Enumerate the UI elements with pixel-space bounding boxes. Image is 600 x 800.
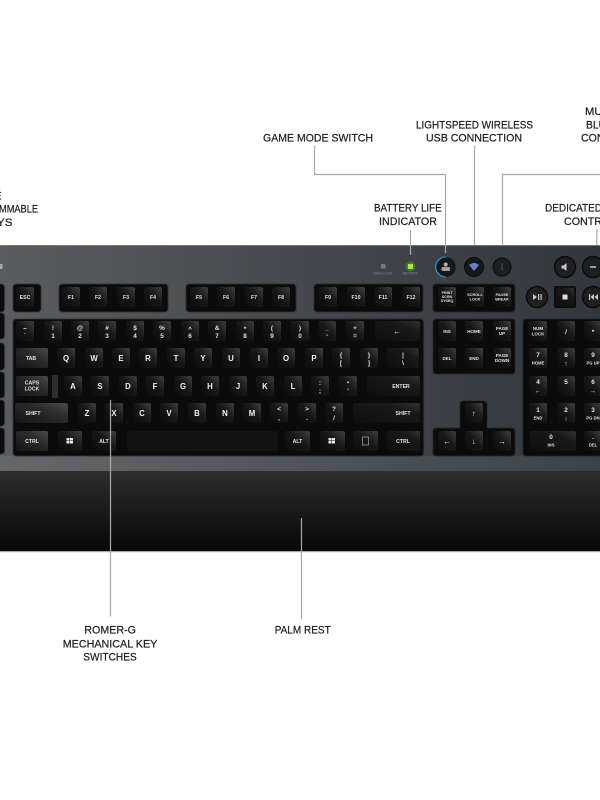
home key row: G — [180, 382, 186, 391]
number key row: = — [353, 333, 357, 340]
leader line: battery indicator — [410, 230, 412, 255]
label: lightspeed wireless — [416, 119, 533, 144]
home key row — [16, 375, 420, 398]
QWERTY key row: W — [90, 354, 98, 363]
function key row: F9 — [325, 295, 331, 301]
numeric keypad: ← — [535, 388, 541, 395]
shift key row: C — [139, 409, 145, 418]
function key row: F8 — [278, 295, 284, 301]
leader line: media controls — [596, 229, 598, 245]
shift key row: SHIFT — [26, 411, 41, 417]
navigation cluster: INS — [443, 329, 451, 334]
number key row: 9 — [270, 333, 274, 340]
numeric keypad: → — [590, 388, 596, 395]
numeric keypad: ↑ — [564, 360, 568, 368]
number key row: + — [353, 325, 357, 332]
label: palm rest: PALM REST — [275, 624, 331, 636]
number key row: 6 — [188, 333, 192, 340]
shift key row: M — [249, 409, 255, 418]
number key row: 5 — [160, 333, 164, 340]
number key row: ^ — [188, 325, 192, 333]
number key row: ( — [271, 325, 274, 332]
number key row: _ — [324, 325, 329, 332]
number key row: % — [159, 325, 165, 332]
arrow keys: ↑ — [472, 409, 476, 418]
number key row: $ — [133, 325, 137, 332]
arrow keys — [438, 403, 511, 451]
navigation cluster: DEL — [442, 356, 452, 361]
number key row: 3 — [105, 333, 109, 340]
number key row: ) — [299, 325, 301, 332]
navigation cluster: PAGE — [496, 326, 508, 331]
QWERTY key row: U — [228, 354, 234, 363]
home key row: LOCK — [25, 386, 40, 392]
numeric keypad: 1 — [536, 407, 540, 414]
shift key row: SHIFT — [396, 411, 411, 417]
number key row: 0 — [298, 333, 302, 340]
home key row: F — [153, 382, 158, 391]
shift key row: > — [305, 406, 309, 413]
shift key row: N — [222, 409, 228, 418]
home key row: K — [262, 382, 268, 391]
leader line: key switches — [110, 400, 112, 616]
bottom key row: ALT — [99, 439, 110, 445]
function key row: F10 — [352, 295, 361, 301]
navigation cluster: UP — [499, 331, 505, 336]
QWERTY key row: } — [368, 352, 371, 359]
number key row: # — [105, 325, 109, 332]
QWERTY key row: Q — [63, 354, 69, 363]
function key row: BREAK — [495, 298, 509, 302]
numeric keypad: 0 — [549, 434, 553, 441]
function key row: F6 — [223, 295, 229, 301]
home key row: : — [319, 380, 321, 387]
number key row: 4 — [133, 333, 137, 340]
number key row: - — [326, 332, 328, 339]
numeric keypad: END — [534, 416, 542, 420]
function key row — [16, 287, 511, 307]
label: programmable keys — [0, 190, 38, 229]
label: romer-g switches: ROMER-G — [84, 624, 136, 636]
QWERTY key row: O — [283, 354, 289, 363]
numeric keypad: 4 — [536, 379, 540, 386]
home key row: ENTER — [392, 384, 410, 390]
shift key row: , — [278, 415, 280, 422]
number key row — [16, 321, 420, 341]
numeric keypad: PG UP — [586, 360, 600, 366]
arrow keys: ← — [443, 437, 451, 446]
function key row: F2 — [95, 295, 101, 301]
numeric keypad: ↓ — [564, 416, 568, 422]
function key row: ESC — [20, 295, 31, 301]
home key row: " — [346, 381, 350, 388]
navigation cluster: PAGE — [496, 353, 508, 358]
home key row: L — [291, 382, 296, 391]
status indicators — [374, 262, 419, 276]
numeric keypad: 2 — [564, 407, 568, 414]
navigation cluster: DOWN — [495, 358, 509, 363]
palm rest — [0, 471, 600, 552]
shift key row: / — [333, 415, 335, 422]
keyboard body — [0, 245, 600, 471]
label: battery life indicator: INDICATOR — [379, 216, 437, 228]
label: battery life indicator: BATTERY LIFE — [374, 203, 442, 215]
numeric keypad: * — [592, 329, 595, 336]
icon: game mode button — [436, 257, 456, 277]
numeric keypad: 9 — [591, 352, 595, 359]
function key row: F5 — [196, 295, 202, 301]
numeric keypad: / — [565, 329, 567, 336]
number key row: 1 — [51, 333, 55, 340]
QWERTY key row: { — [340, 352, 343, 359]
leader line: game mode switch — [314, 146, 446, 253]
number key row: ! — [52, 325, 54, 332]
QWERTY key row: \ — [402, 360, 404, 367]
shift key row: < — [277, 406, 281, 413]
QWERTY key row: E — [118, 354, 124, 363]
home key row: ; — [319, 388, 321, 395]
arrow keys: → — [498, 437, 506, 446]
home key row: S — [97, 382, 103, 391]
navigation cluster — [438, 321, 511, 368]
label: romer-g switches — [63, 624, 158, 664]
QWERTY key row: ] — [368, 360, 370, 367]
numeric keypad: HOME — [532, 360, 544, 366]
leader line: palm rest — [300, 518, 302, 619]
QWERTY key row: | — [402, 352, 404, 359]
function key row: PAUSE — [496, 293, 509, 297]
numeric keypad: PG DN — [586, 416, 600, 420]
label: programmable keys: MMABLE — [0, 204, 38, 216]
QWERTY key row: P — [311, 354, 317, 363]
home key row: A — [70, 382, 76, 391]
label: bluetooth connection — [581, 106, 600, 144]
bottom key row — [16, 431, 420, 451]
number key row: * — [244, 326, 247, 333]
number key row: ` — [24, 333, 26, 340]
numeric keypad: LOCK — [532, 332, 545, 336]
function key row: LOCK — [470, 298, 481, 302]
label: lightspeed wireless: USB CONNECTION — [426, 132, 522, 144]
numeric keypad: 3 — [591, 407, 595, 414]
navigation cluster: END — [469, 356, 479, 361]
status indicators: CAPS LOCK — [374, 272, 393, 276]
function key row: F12 — [407, 295, 416, 301]
shift key row: ? — [332, 406, 336, 413]
leader line: bluetooth — [502, 174, 600, 245]
function key row: SCROLL — [467, 293, 483, 297]
numeric keypad: DEL — [589, 442, 598, 448]
function key row: SYSRQ — [441, 299, 453, 303]
numeric keypad: 8 — [564, 352, 568, 359]
shift key row: Z — [85, 409, 90, 418]
navigation cluster: HOME — [467, 329, 481, 334]
home key row: H — [207, 382, 213, 391]
numeric keypad — [529, 321, 600, 451]
number key row: @ — [77, 325, 83, 332]
bottom key row: CTRL — [396, 439, 411, 445]
QWERTY key row: TAB — [26, 356, 36, 362]
label: dedicated controls — [545, 203, 600, 228]
QWERTY key row: [ — [340, 360, 343, 367]
shift key row — [15, 403, 420, 423]
icon: bluetooth button — [493, 258, 511, 276]
numeric keypad: INS — [548, 442, 555, 448]
bottom key row: CTRL — [25, 439, 40, 445]
function key row: F7 — [251, 295, 257, 301]
function key row: PRINT — [442, 291, 453, 295]
home key row: D — [125, 382, 131, 391]
number key row: 2 — [78, 333, 82, 340]
number key row: 8 — [243, 333, 247, 340]
label: game mode switch: GAME MODE SWITCH — [263, 132, 373, 144]
QWERTY key row — [16, 348, 419, 368]
QWERTY key row: R — [145, 354, 151, 363]
shift key row: . — [306, 415, 308, 422]
number key row: & — [215, 325, 220, 332]
function key row: SCRN — [442, 295, 452, 299]
bottom key row: ALT — [293, 439, 303, 445]
shift key row: X — [111, 409, 117, 418]
label: lightspeed wireless: LIGHTSPEED WIRELESS — [416, 119, 533, 131]
numeric keypad: NUM — [533, 326, 543, 331]
label: romer-g switches: SWITCHES — [83, 652, 137, 664]
key wells — [0, 284, 600, 456]
home key row: ' — [347, 388, 349, 395]
numeric keypad: 6 — [591, 379, 595, 386]
label: battery life indicator — [374, 203, 442, 228]
home key row: CAPS — [25, 380, 40, 386]
label: romer-g switches: MECHANICAL KEY — [63, 638, 158, 650]
numeric keypad: 7 — [536, 352, 540, 359]
icon: wireless button — [464, 258, 484, 276]
number key row: ← — [393, 327, 401, 336]
arrow keys: ↓ — [472, 437, 476, 446]
shift key row: B — [194, 409, 200, 418]
home key row: J — [236, 382, 240, 391]
QWERTY key row: Y — [200, 354, 206, 363]
QWERTY key row: I — [258, 354, 260, 363]
shift key row: V — [166, 409, 172, 418]
numeric keypad: . — [592, 434, 594, 441]
number key row: ~ — [23, 326, 27, 333]
function key row: F4 — [150, 295, 156, 301]
numeric keypad: 5 — [564, 379, 568, 386]
number key row: 7 — [215, 333, 219, 340]
QWERTY key row: T — [174, 354, 179, 363]
function key row: F3 — [123, 295, 129, 301]
function key row: F1 — [68, 295, 74, 301]
leader line: wireless connection — [474, 146, 476, 245]
status indicators: BATTERY — [403, 272, 419, 276]
media controls — [526, 256, 600, 308]
function key row: F11 — [379, 295, 387, 301]
